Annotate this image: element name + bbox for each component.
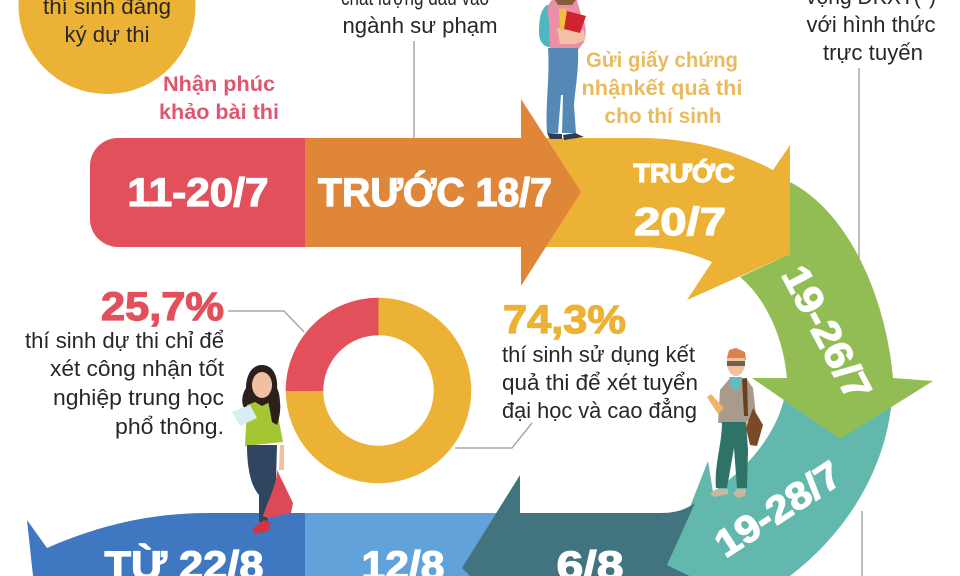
- date labels: TRƯỚC 18/7: [318, 169, 552, 215]
- date labels: 19-26/7: [773, 259, 879, 408]
- stat: 25,7%: 25,7%: [101, 285, 224, 329]
- text: quality threshold: ngành sư phạm: [342, 13, 498, 38]
- stat: 74,3%: 74,3%: [503, 298, 626, 342]
- yellow arrow segment: [540, 138, 790, 300]
- heading: exam review: Nhận phúc: [163, 73, 275, 96]
- icon: student with glasses and satchel: [707, 348, 763, 498]
- green arrow segment: [740, 182, 933, 439]
- teal arrow segment: [667, 378, 893, 576]
- text: online registration: [806, 0, 936, 65]
- orange arrow segment: [305, 99, 581, 286]
- heading: send certificates: nhậnkết quả thi: [582, 77, 742, 100]
- date labels: [104, 158, 879, 576]
- icon: student with backpack and books: [539, 0, 586, 140]
- text: online registration: trực tuyến: [823, 40, 923, 65]
- light blue segment: [305, 513, 502, 576]
- stat: 74,3%: quả thi để xét tuyển: [502, 370, 698, 395]
- stat: 74,3%: [502, 298, 698, 423]
- stat: 74,3%: đại học và cao đẳng: [502, 398, 697, 423]
- dark teal arrow segment: [462, 475, 695, 576]
- date labels: 20/7: [634, 201, 726, 244]
- stat: 25,7%: nghiệp trung học: [53, 385, 224, 410]
- stat: 25,7%: [25, 285, 224, 439]
- circle callout: registered candidates: ký dự thi: [64, 22, 150, 47]
- stat: 25,7%: phổ thông.: [115, 414, 224, 439]
- leader lines: [228, 41, 862, 576]
- red segment: [90, 138, 305, 247]
- stat: 25,7%: thí sinh dự thi chỉ để: [25, 328, 224, 353]
- heading: send certificates: Gửi giấy chứng: [586, 49, 738, 72]
- heading: exam review: [159, 73, 279, 124]
- heading: exam review: khảo bài thi: [159, 101, 279, 124]
- stat: 74,3%: thí sinh sử dụng kết: [502, 342, 695, 367]
- text: online registration: với hình thức: [806, 12, 936, 37]
- heading: send certificates: [582, 49, 742, 128]
- text: quality threshold: [341, 0, 498, 38]
- date labels: 11-20/7: [128, 171, 268, 215]
- blue segment: [27, 513, 305, 576]
- donut chart: [304, 316, 452, 464]
- stat: 25,7%: xét công nhận tốt: [50, 356, 224, 381]
- date labels: TRƯỚC: [634, 158, 735, 188]
- heading: send certificates: cho thí sinh: [604, 105, 722, 128]
- date labels: 19-28/7: [707, 454, 849, 566]
- icon: student with notebook and bag: [232, 365, 293, 534]
- circle callout: registered candidates: [18, 0, 196, 94]
